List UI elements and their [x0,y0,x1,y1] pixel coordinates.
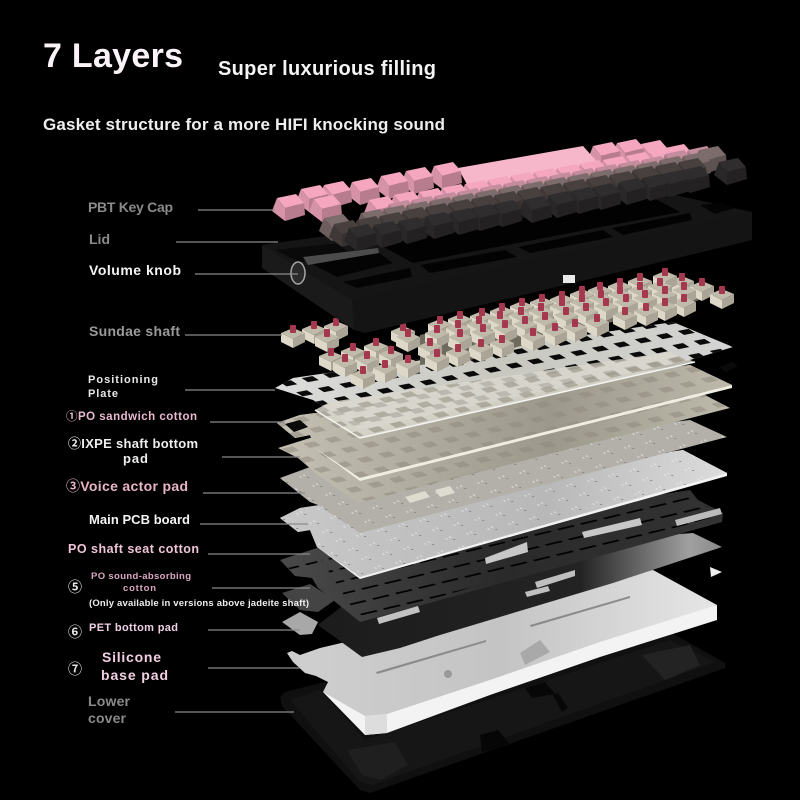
volume knob [291,262,305,284]
positioning plate [275,322,733,438]
label: Sundae shaft: Sundae shaft [89,323,180,339]
label: IXPE shaft bottom pad: pad [123,451,148,466]
label: Positioning Plate: Plate [88,388,118,400]
exploded keyboard [262,139,752,793]
sundae shaft switches [281,268,734,389]
note: versions: (Only available in versions above jadeite shaft) [89,598,309,609]
PET bottom pad [282,533,722,657]
label: Lower cover [88,693,131,726]
key caps [272,139,747,251]
label: Silicone base pad: Silicone [102,649,161,665]
label: Volume knob: Volume knob [89,262,181,278]
label: PO sound-absorbing cotton: cotton [123,583,156,594]
label: Silicone base pad: base pad [101,667,168,683]
IXPE shaft bottom pad [278,395,730,503]
USB port [563,275,575,283]
PO sound-absorbing cotton [282,584,335,612]
number 6: ⑥ [68,624,82,640]
label: Main PCB board: Main PCB board [89,512,190,527]
label: IXPE shaft bottom pad [68,436,198,466]
number 7: ⑦ [68,661,82,677]
lower cover [280,632,725,793]
label: Positioning Plate: Positioning [88,374,158,386]
white triangle marker [710,567,722,577]
label: IXPE shaft bottom pad: ②IXPE shaft bottom [68,436,198,451]
label: PO shaft seat cotton: PO shaft seat cotton [68,542,199,556]
lid case [262,190,752,333]
tagline: Gasket structure for a more HIFI knocking sound [43,115,445,134]
voice actor pad [280,420,727,533]
title: 7 Layers [43,37,183,75]
subtitle: Super luxurious filling [218,58,436,80]
label: PO sound-absorbing cotton [91,571,191,594]
PO shaft seat cotton [280,490,723,624]
label: PBT Key Cap: PBT Key Cap [88,199,173,215]
label: Lid: Lid [89,231,110,247]
label: Positioning Plate [88,374,158,400]
label: PO sandwich cotton: ①PO sandwich cotton [66,410,197,423]
label: Lower cover: cover [88,710,127,726]
silicone base pad [287,570,717,735]
label: Lower cover: Lower [88,693,131,709]
label: Silicone base pad [101,649,168,683]
label: PO sound-absorbing cotton: PO sound-absorbing [91,571,191,582]
leader lines [175,210,310,712]
label: Voice actor pad: ③Voice actor pad [66,478,188,494]
main PCB board [280,450,727,579]
number 5: ⑤ [68,579,82,595]
PO sandwich cotton [277,362,738,481]
label: PET bottom pad: PET bottom pad [89,622,178,634]
